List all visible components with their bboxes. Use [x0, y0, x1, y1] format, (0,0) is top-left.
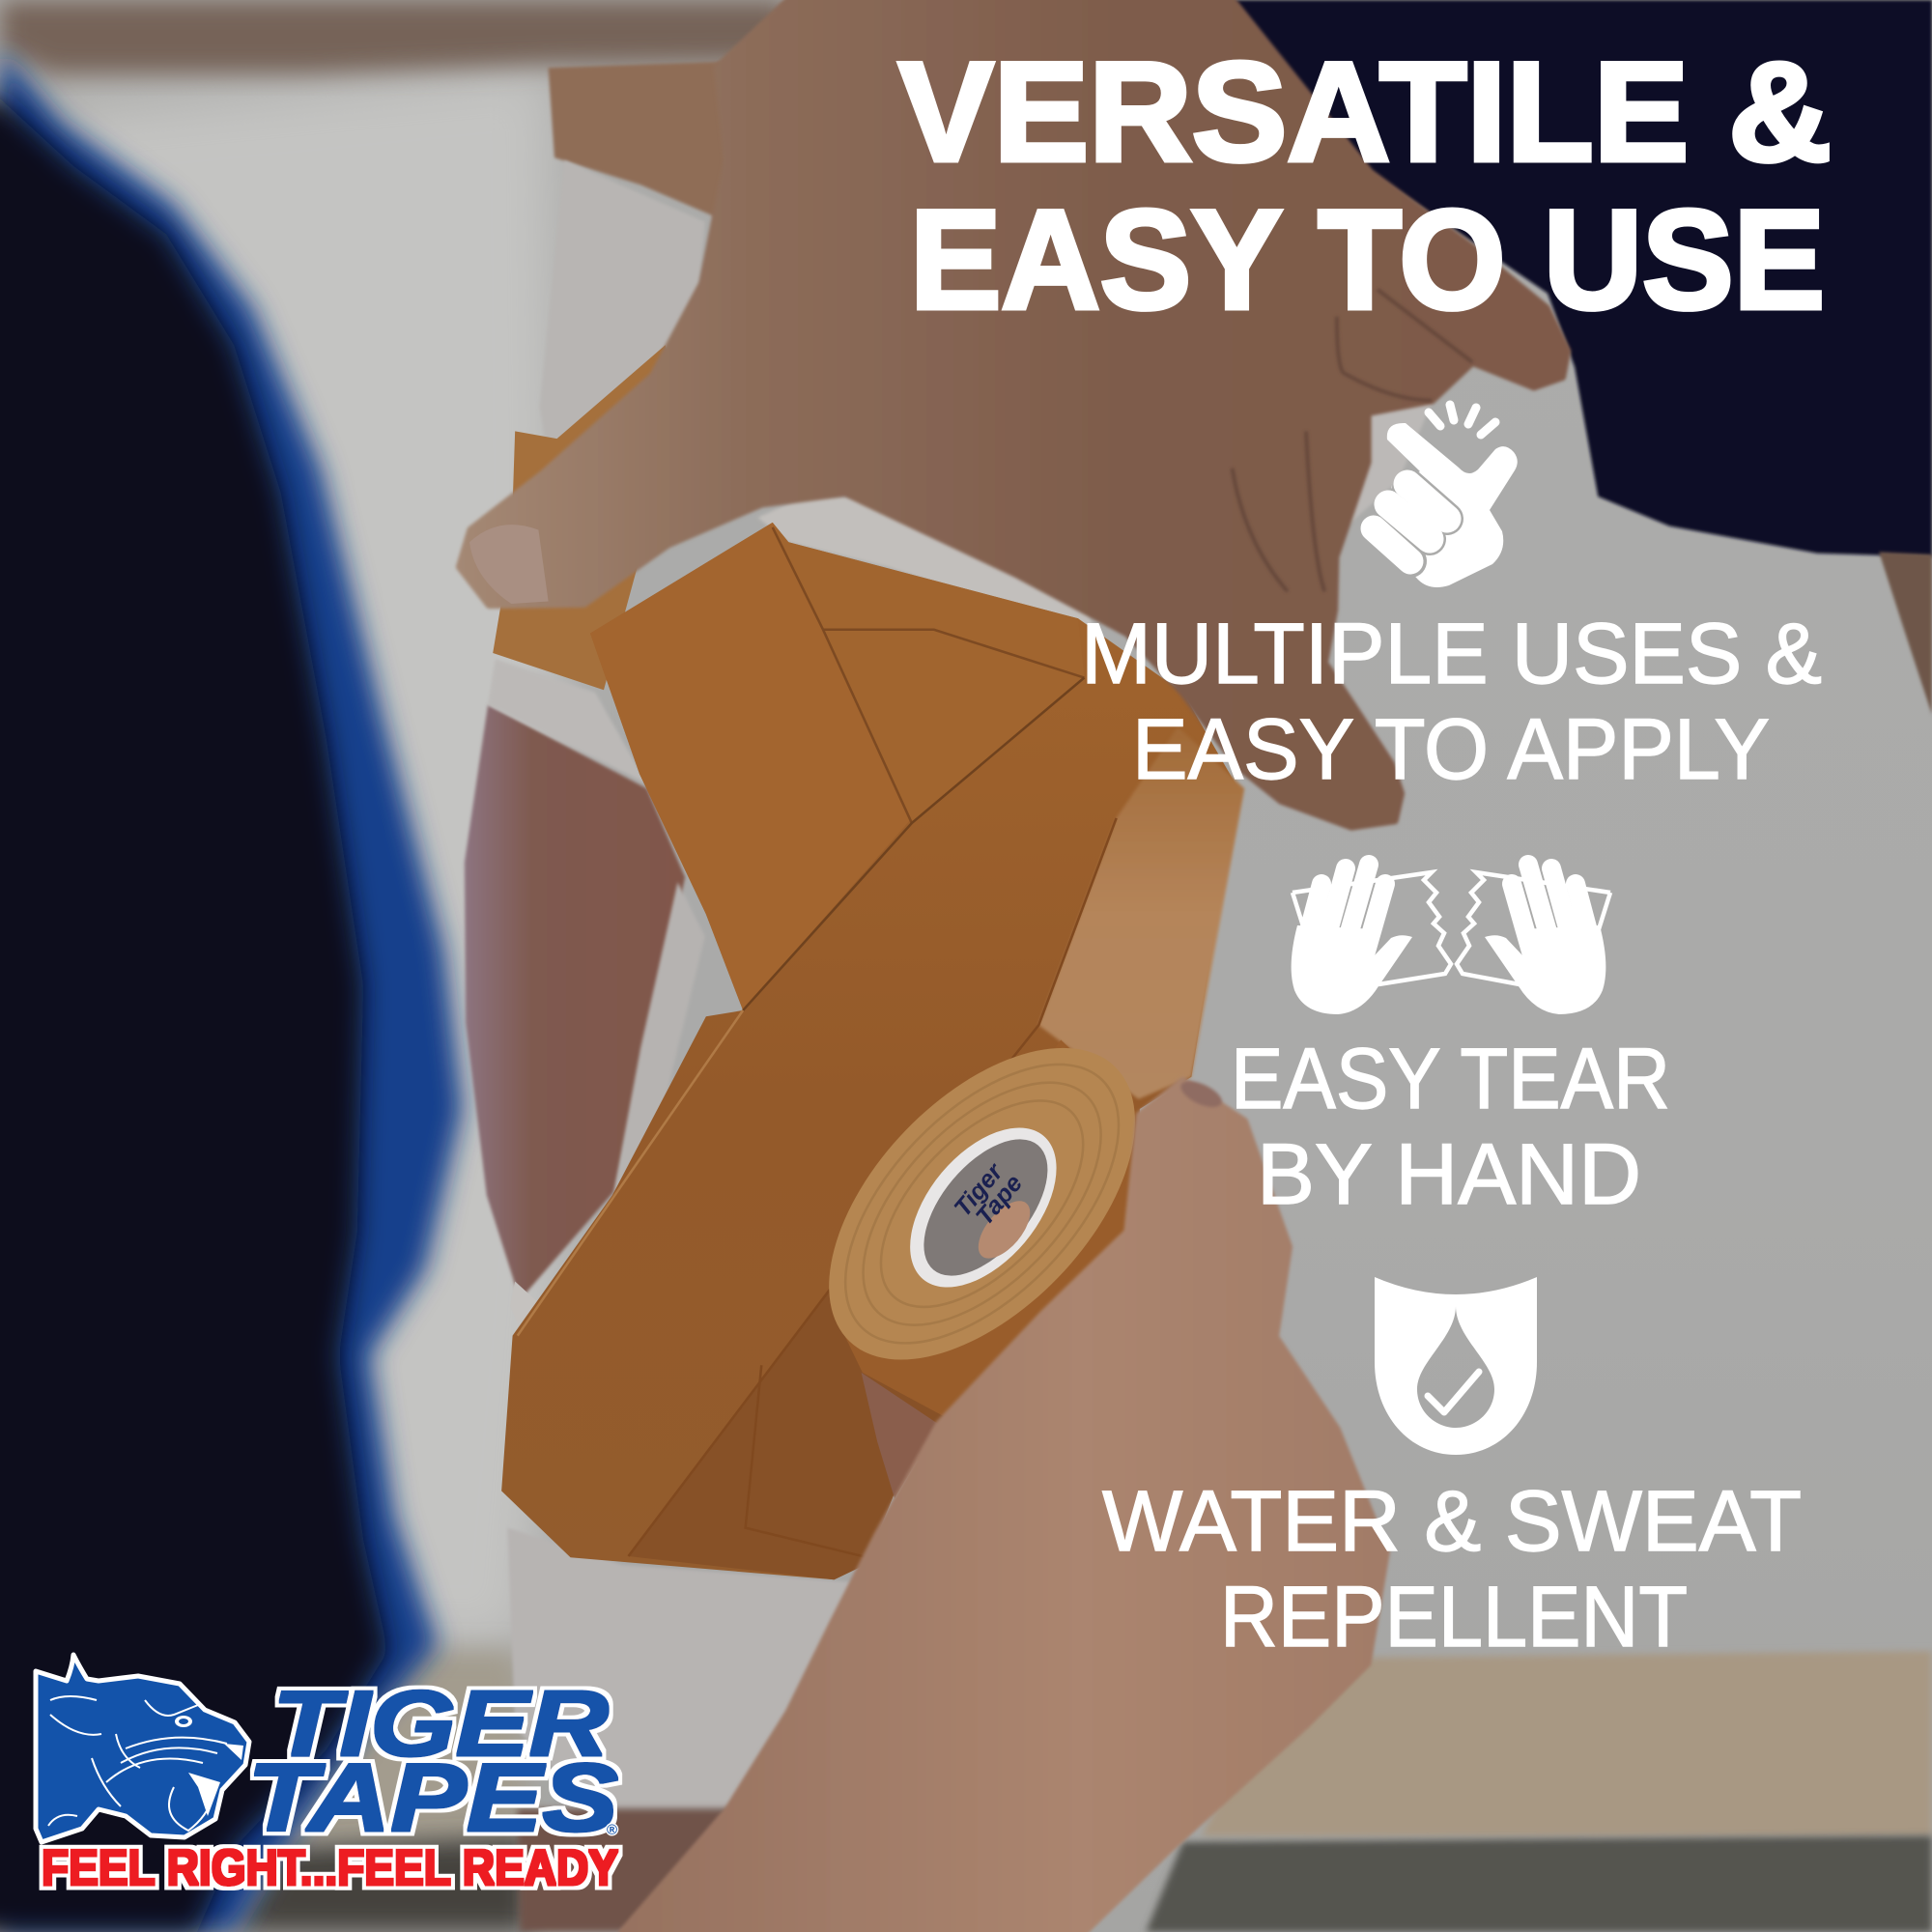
- tape: lower patch: [629, 1254, 974, 1579]
- heading: easy tear: [1231, 1030, 1670, 1222]
- person in the foreground: blue shirt edge: [0, 49, 462, 1932]
- heading: multiple uses: [1081, 605, 1822, 797]
- white underwrap strip, upper: [757, 496, 1096, 635]
- background: lower-left dark floor: [234, 1836, 529, 1932]
- tape: left panel: [590, 523, 912, 1010]
- left hand: [1292, 865, 1412, 1014]
- icon: tearing tape by hand: [1292, 865, 1610, 1014]
- tape roll: rings: [797, 1016, 1168, 1391]
- lower thumb nail: [1178, 1076, 1226, 1113]
- thigh skin above bandage: [549, 62, 727, 222]
- tape roll: side: [845, 1040, 1140, 1417]
- logo: registered mark: ®: [607, 1822, 617, 1838]
- tape roll: core print: Tape: [971, 1170, 1028, 1231]
- logo: tagline: FEEL RIGHT...FEEL READY: [42, 1840, 618, 1896]
- white underwrap around knee: [488, 659, 647, 783]
- tape: upper patch: [773, 523, 1084, 823]
- tape roll: finger in core: [969, 1192, 1039, 1267]
- lower hand: [622, 1081, 1386, 1932]
- logo: tiger head: [36, 1655, 249, 1842]
- heading: water and sweat: [1102, 1472, 1802, 1664]
- torn strip, right piece: [1457, 872, 1610, 984]
- logo: wordmark: TAPES: [247, 1744, 618, 1851]
- logo: wordmark: TIGER: [272, 1672, 609, 1776]
- tape roll: core print: [949, 1155, 1028, 1236]
- person in the foreground: dark shirt: [0, 99, 388, 1932]
- white underwrap behind fingers: [1343, 370, 1435, 524]
- right hand: [1485, 865, 1605, 1014]
- white underwrap lower: [508, 1528, 868, 1808]
- torn strip, left piece: [1293, 872, 1451, 984]
- arm at right edge: [1879, 552, 1932, 715]
- logo: wordmark: [247, 1672, 618, 1851]
- lower hand finger behind roll: [862, 1373, 939, 1498]
- navy shorts: [1225, 0, 1932, 557]
- white underwrap strip, side: [613, 882, 705, 1193]
- blurred arm at top left: [0, 0, 788, 74]
- tape roll: core: [882, 1101, 1085, 1314]
- title: VERSATILE &: [898, 33, 1832, 190]
- background: wooden bench: [1202, 1651, 1932, 1836]
- tape roll: core inner: [900, 1118, 1071, 1297]
- tape behind thumb: [493, 345, 671, 690]
- tape roll: core print: Tiger: [949, 1157, 1009, 1222]
- finger creases: [1233, 290, 1472, 591]
- heading: water and sweat: REPELLENT: [1220, 1568, 1688, 1664]
- thumb nail: [469, 525, 549, 604]
- logo: Tiger Tapes: [36, 1655, 618, 1896]
- tape roll: face: [773, 993, 1191, 1415]
- white underwrap below knee: [510, 1282, 542, 1337]
- tape seams: [518, 527, 1117, 1557]
- icon: snapping fingers: [1374, 405, 1518, 587]
- skin below wrap: [518, 1808, 733, 1932]
- lighter tape strip: [1038, 727, 1244, 1099]
- background: lower-left floor: [296, 1651, 529, 1848]
- icon: water shield with drop and check: [1375, 1277, 1537, 1455]
- main tape: [501, 523, 1238, 1579]
- background: floor: [1146, 1836, 1932, 1932]
- upper hand: [460, 0, 1567, 827]
- title: [898, 33, 1832, 338]
- white underwrap upper: [540, 160, 705, 462]
- heading: easy tear: BY HAND: [1257, 1125, 1641, 1222]
- knee skin: [465, 705, 685, 1300]
- heading: water and sweat: WATER & SWEAT: [1102, 1472, 1802, 1569]
- background: pale wall at left: [49, 62, 567, 1651]
- heading: easy tear: EASY TEAR: [1231, 1030, 1670, 1126]
- heading: multiple uses: EASY TO APPLY: [1132, 700, 1770, 797]
- heading: multiple uses: MULTIPLE USES &: [1081, 605, 1822, 701]
- title: EASY TO USE: [910, 181, 1825, 338]
